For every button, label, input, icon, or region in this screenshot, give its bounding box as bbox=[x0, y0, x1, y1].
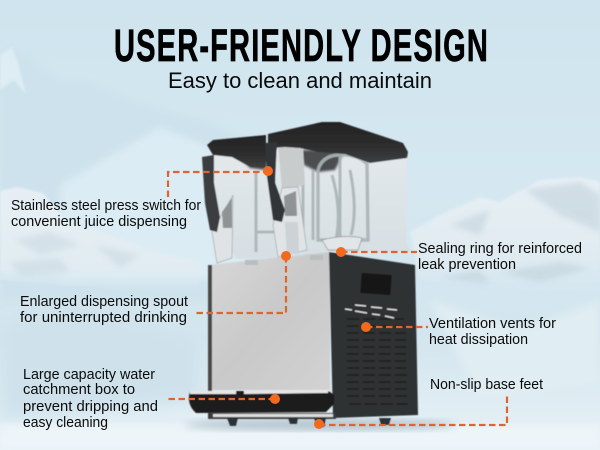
left lid bbox=[207, 135, 266, 168]
callout: dispensing spout: for uninterrupted drinking bbox=[20, 310, 187, 326]
lid drip tabs bbox=[245, 255, 323, 265]
feet bbox=[227, 418, 391, 427]
callout: press switch: convenient juice dispensing bbox=[11, 214, 187, 230]
callout: ventilation vents: heat dissipation bbox=[429, 332, 528, 348]
callout: dispensing spout bbox=[20, 251, 291, 326]
drip tray bbox=[189, 391, 334, 413]
callout: catchment box: prevent dripping and bbox=[23, 399, 158, 415]
right lid bbox=[268, 122, 408, 163]
centre nozzle bbox=[273, 187, 307, 257]
black side body bbox=[329, 252, 418, 418]
callout: sealing ring: leak prevention bbox=[418, 257, 516, 273]
display window bbox=[360, 273, 392, 295]
right handle bbox=[265, 142, 285, 222]
callout: ventilation vents: Ventilation vents for bbox=[429, 316, 556, 332]
white vent highlights bbox=[345, 305, 397, 318]
callout: catchment box: Large capacity water bbox=[23, 367, 155, 383]
left handle bbox=[202, 155, 220, 232]
callout: press switch: Stainless steel press switch for bbox=[11, 198, 201, 214]
ventilation vents bbox=[347, 319, 408, 404]
dark interior under lids bbox=[235, 150, 345, 172]
callout: sealing ring: Sealing ring for reinforced bbox=[418, 241, 582, 257]
callout: base feet bbox=[314, 377, 543, 429]
callout: dispensing spout: Enlarged dispensing spout bbox=[20, 294, 188, 310]
juice dispenser machine bbox=[185, 122, 455, 431]
callout: sealing ring bbox=[336, 241, 582, 273]
callout: base feet: Non-slip base feet bbox=[430, 377, 543, 393]
callout: ventilation vents bbox=[361, 316, 556, 348]
left tank bbox=[213, 152, 280, 259]
callout: press switch bbox=[11, 166, 273, 230]
right tank bbox=[268, 150, 412, 258]
callout: catchment box: catchment box to bbox=[23, 382, 135, 398]
left nozzle bbox=[212, 195, 233, 263]
steel column behind centre handle bbox=[278, 144, 305, 190]
drain cup bbox=[322, 236, 362, 250]
floor shadow bbox=[185, 419, 455, 431]
stainless front bbox=[208, 252, 330, 390]
callout: catchment box: easy cleaning bbox=[23, 415, 108, 431]
base strip bbox=[208, 413, 336, 419]
subtitle: Easy to clean and maintain bbox=[168, 68, 432, 93]
tank internals: paddle frames bbox=[256, 155, 368, 252]
callout: catchment box bbox=[23, 367, 280, 431]
